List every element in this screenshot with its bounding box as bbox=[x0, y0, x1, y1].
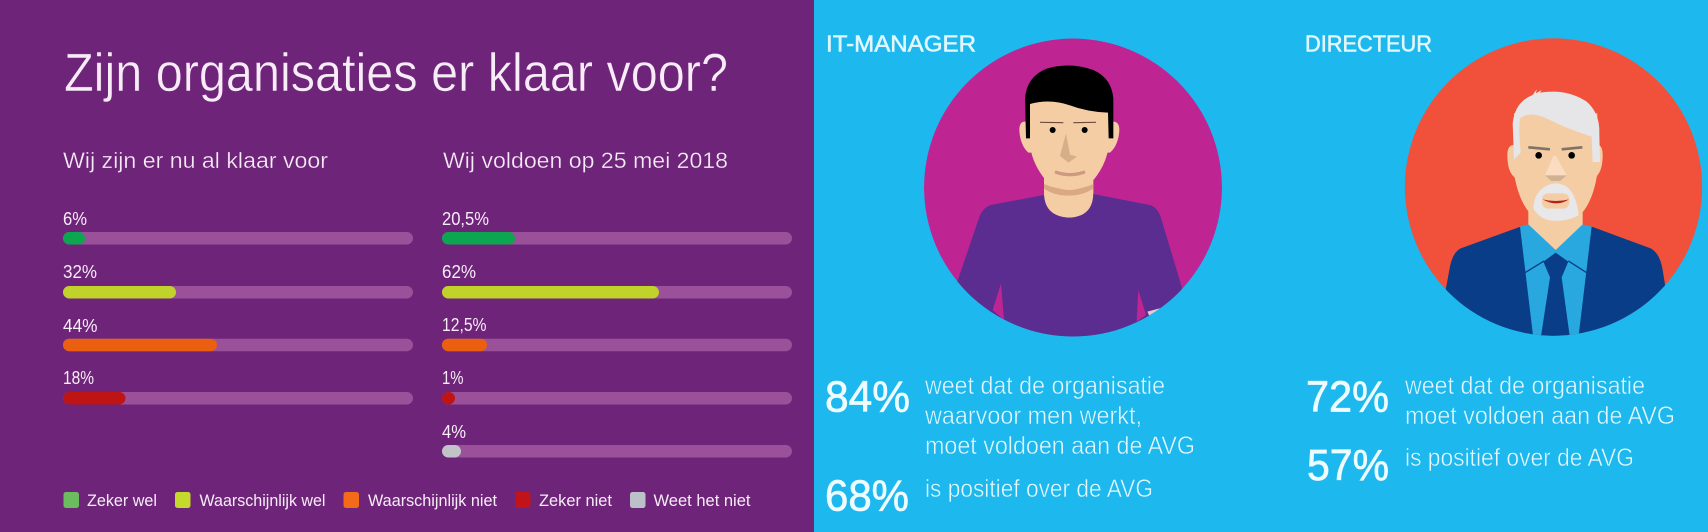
mouth bbox=[1543, 199, 1569, 203]
hair bbox=[1513, 89, 1600, 162]
brows bbox=[1528, 147, 1582, 149]
bar: 12,5% waarschijnlijk niet: 12,5% bbox=[442, 315, 486, 335]
text: 72% description: weet dat de organisatie bbox=[1404, 372, 1645, 400]
collar lines bbox=[1525, 261, 1587, 273]
legend bbox=[64, 491, 751, 510]
bar chart: now ready bbox=[63, 209, 413, 404]
bar: 20,5% zeker wel bbox=[442, 209, 792, 244]
face bbox=[1514, 113, 1597, 222]
text: 84% description: weet dat de organisatie bbox=[924, 372, 1165, 400]
title: Zijn organisaties er klaar voor? bbox=[64, 43, 728, 103]
neck bbox=[1528, 211, 1583, 250]
heading: now ready: Wij zijn er nu al klaar voor bbox=[63, 148, 328, 173]
nose bbox=[1545, 156, 1567, 175]
bar: 32% waarschijnlijk wel: 32% bbox=[63, 262, 97, 282]
bar: 1% zeker niet: 1% bbox=[442, 368, 464, 388]
text: 57% description: is positief over de AVG bbox=[1405, 444, 1634, 472]
bar: 32% waarschijnlijk wel bbox=[63, 262, 413, 298]
text: 84% description bbox=[924, 372, 1195, 460]
ears bbox=[1019, 122, 1032, 153]
panel: it-manager bbox=[825, 30, 1222, 520]
suit bbox=[1446, 226, 1666, 336]
panel: readiness survey bbox=[0, 0, 814, 532]
bar: 20,5% zeker wel: 20,5% bbox=[442, 209, 489, 229]
bar: 1% zeker niet bbox=[442, 368, 792, 404]
shirt bbox=[957, 194, 1187, 347]
text: 72% description: moet voldoen aan de AVG bbox=[1405, 402, 1675, 430]
stat: 68%: 68% bbox=[825, 472, 909, 520]
text: 84% description: waarvoor men werkt, bbox=[924, 402, 1142, 430]
legend item: waarschijnlijk niet: Waarschijnlijk niet bbox=[368, 491, 497, 510]
nose bbox=[1060, 133, 1077, 163]
legend item: weet het niet: Weet het niet bbox=[654, 491, 751, 510]
heading: directeur: DIRECTEUR bbox=[1305, 30, 1432, 56]
bar: 12,5% waarschijnlijk niet bbox=[442, 315, 792, 351]
bar: 18% zeker niet bbox=[63, 368, 413, 404]
icon: director portrait bbox=[1405, 38, 1702, 347]
beard bbox=[1533, 183, 1579, 221]
text: 84% description: moet voldoen aan de AVG bbox=[925, 432, 1195, 460]
bar: 18% zeker niet: 18% bbox=[63, 368, 94, 388]
bar: 62% waarschijnlijk wel bbox=[442, 262, 792, 298]
tie bbox=[1541, 253, 1570, 338]
legend item: waarschijnlijk wel: Waarschijnlijk wel bbox=[200, 491, 326, 510]
eyes bbox=[1535, 152, 1542, 159]
stat: 84%: 84% bbox=[825, 372, 910, 422]
shirt bbox=[1520, 224, 1592, 338]
ears bbox=[1507, 145, 1603, 178]
bar chart: compliant on 25 May 2018 bbox=[442, 209, 792, 458]
bar: 4% weet het niet bbox=[442, 422, 792, 458]
bar: 44% waarschijnlijk niet: 44% bbox=[63, 316, 98, 336]
heading: compliant on 25 May 2018: Wij voldoen op 25 mei 2018 bbox=[443, 148, 728, 173]
stat: 57%: 57% bbox=[1307, 441, 1389, 490]
icon: it-manager portrait bbox=[924, 38, 1222, 347]
legend item: zeker wel: Zeker wel bbox=[87, 491, 157, 510]
panel: directeur bbox=[1305, 30, 1702, 490]
bar: 6% zeker wel bbox=[63, 209, 413, 244]
bar: 62% waarschijnlijk wel: 62% bbox=[442, 262, 476, 282]
neck bbox=[1044, 173, 1093, 218]
hair bbox=[1025, 65, 1113, 138]
text: 72% description bbox=[1404, 372, 1675, 430]
heading: it-manager: IT-MANAGER bbox=[826, 30, 976, 56]
legend item: zeker niet: Zeker niet bbox=[539, 491, 612, 510]
mouth bbox=[1056, 172, 1084, 175]
text: 68% description: is positief over de AVG bbox=[925, 475, 1153, 503]
face bbox=[1029, 97, 1109, 190]
bar: 6% zeker wel: 6% bbox=[63, 209, 87, 229]
bar: 4% weet het niet: 4% bbox=[442, 422, 466, 442]
eyes and brows bbox=[1050, 127, 1056, 133]
stat: 72%: 72% bbox=[1306, 372, 1389, 422]
bar: 44% waarschijnlijk niet bbox=[63, 316, 413, 351]
